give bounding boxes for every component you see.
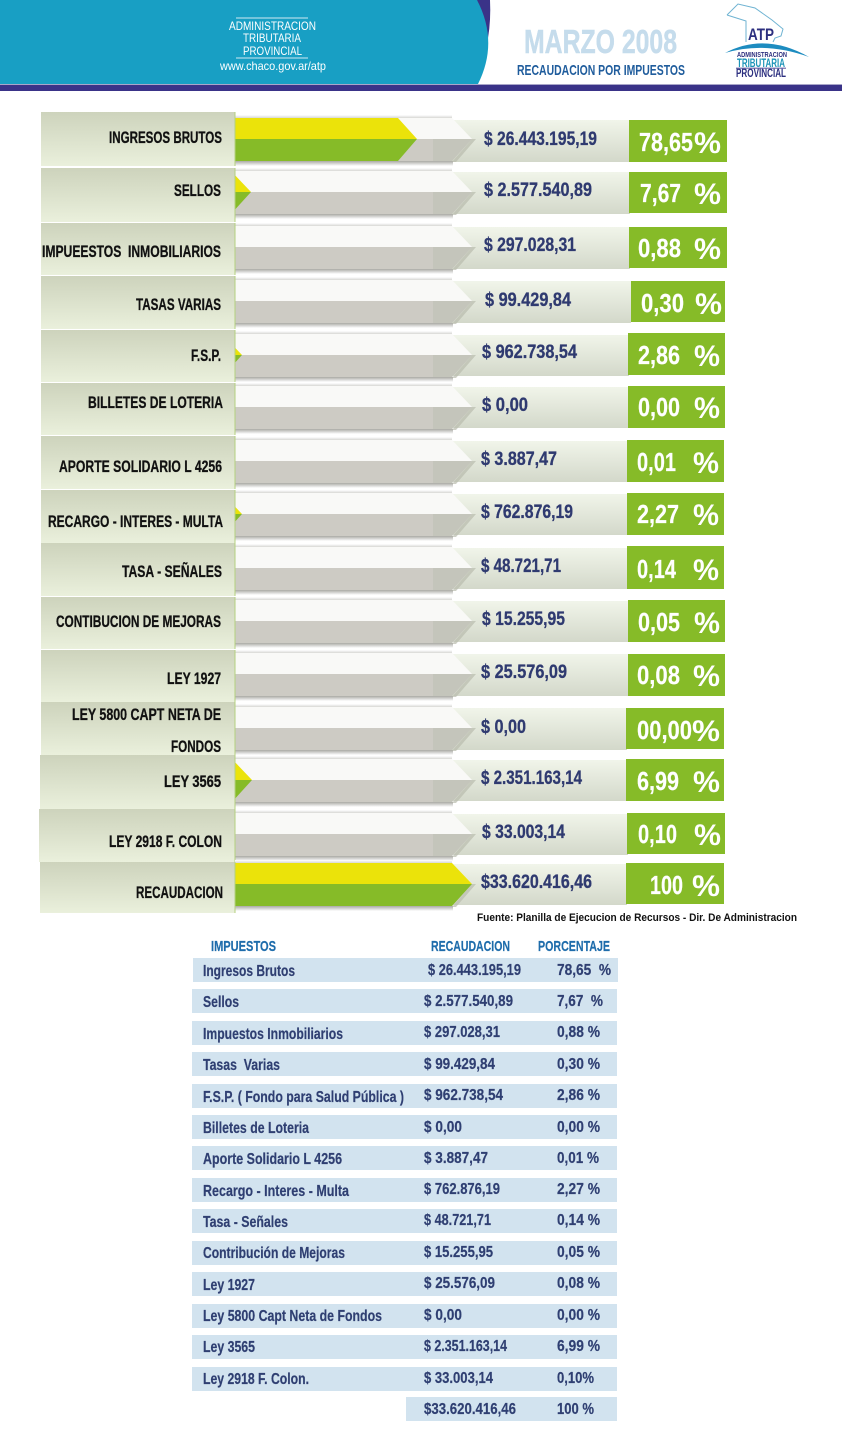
header agency name <box>219 18 326 73</box>
row: Ley 2918: 0,10 <box>638 819 677 849</box>
row: F.S.P.: 2,86 <box>638 340 680 370</box>
table header <box>211 938 610 955</box>
row: Aporte Solidario: $ 3.887,47 <box>481 449 557 470</box>
row: Ley 2918: $ 33.003,14 <box>482 822 565 843</box>
table row: Billetes de Loteria: $ 0,00 <box>424 1119 462 1136</box>
row: Ley 5800: LEY 5800 CAPT NETA DE <box>72 705 221 724</box>
table row: Ley 1927: Ley 1927 <box>203 1277 255 1294</box>
row: Contribucion de Mejoras <box>41 597 725 649</box>
table row: Ley 3565: Ley 3565 <box>203 1339 255 1356</box>
table row: Sellos: Sellos <box>203 994 239 1011</box>
row: Ley 2918: LEY 2918 F. COLON <box>109 832 222 851</box>
table row: Aporte Solidario <box>192 1146 617 1170</box>
logo: ATP: ADMINISTRACION <box>737 52 787 59</box>
table header: RECAUDACION <box>431 938 510 955</box>
table row: Ley 3565: 6,99 % <box>557 1338 600 1355</box>
table row: Tasa Senales: Tasa - Señales <box>203 1214 288 1231</box>
row: Recargo Interes Multa <box>41 490 724 543</box>
table row: Tasa Senales <box>192 1209 617 1233</box>
table row: Recargo Interes Multa: 2,27 % <box>557 1181 600 1198</box>
row: Contribucion de Mejoras: CONTIBUCION DE MEJORAS <box>56 612 221 631</box>
row: Tasas Varias: % <box>695 288 722 321</box>
row: Sellos: SELLOS <box>174 181 221 200</box>
row: Ley 1927 <box>41 650 725 702</box>
row: Billetes de Loteria <box>41 383 725 435</box>
table row: Impuestos Inmobiliarios: 0,88 % <box>557 1024 600 1041</box>
row: Ley 5800: FONDOS <box>171 737 221 756</box>
row: Ingresos Brutos: $ 26.443.195,19 <box>484 129 597 150</box>
table row: Impuestos Inmobiliarios: Impuestos Inmobiliarios <box>203 1026 343 1043</box>
table row: F.S.P.: 2,86 % <box>557 1087 600 1104</box>
row: Ingresos Brutos: % <box>694 127 721 160</box>
table row: Ley 2918 <box>192 1367 617 1391</box>
row: Recargo Interes Multa: RECARGO - INTERES - MULTA <box>48 512 223 531</box>
row: Tasas Varias: 0,30 <box>641 288 684 318</box>
table row: F.S.P.: $ 962.738,54 <box>424 1087 503 1104</box>
row: Recaudacion total: $33.620.416,46 <box>481 872 592 893</box>
row: Ley 2918 <box>39 809 725 862</box>
table row: Ley 3565 <box>192 1335 617 1359</box>
table row: Sellos <box>192 989 617 1013</box>
table row: Recargo Interes Multa: $ 762.876,19 <box>424 1181 500 1198</box>
row: F.S.P.: F.S.P. <box>191 346 221 365</box>
table row: Contribucion de Mejoras: 0,05 % <box>557 1244 600 1261</box>
row: Tasas Varias: $ 99.429,84 <box>485 290 571 311</box>
row: Aporte Solidario: 0,01 <box>637 447 676 477</box>
header agency name: TRIBUTARIA <box>243 31 301 45</box>
table row: Billetes de Loteria <box>192 1115 617 1139</box>
row: Sellos: $ 2.577.540,89 <box>484 180 592 201</box>
logo: ATP <box>725 4 809 80</box>
row: Tasa Senales: $ 48.721,71 <box>481 556 561 577</box>
row: Recaudacion total: 100 <box>650 870 683 900</box>
row: Recaudacion total <box>40 860 724 913</box>
table row: Tasas Varias: Tasas Varias <box>203 1057 280 1074</box>
row: Ley 3565: LEY 3565 <box>164 772 221 791</box>
table row: Ingresos Brutos: $ 26.443.195,19 <box>428 962 521 979</box>
table row: Ley 3565: $ 2.351.163,14 <box>424 1338 507 1355</box>
row: Ingresos Brutos: INGRESOS BRUTOS <box>109 128 222 147</box>
table row: Tasas Varias <box>192 1052 617 1076</box>
row: Tasa Senales: % <box>693 554 719 587</box>
row: Ley 3565 <box>40 755 724 809</box>
row: Ley 5800 <box>41 702 724 756</box>
row: Recargo Interes Multa: 2,27 <box>637 499 679 529</box>
row: Ley 5800: 00,00 <box>637 715 692 745</box>
row: Ley 1927: $ 25.576,09 <box>481 662 567 683</box>
row: Sellos: 7,67 <box>640 178 681 208</box>
table header: PORCENTAJE <box>538 938 610 955</box>
table row: Ley 1927: $ 25.576,09 <box>424 1275 495 1292</box>
row: Billetes de Loteria: BILLETES DE LOTERIA <box>88 393 223 412</box>
table row: total <box>406 1397 617 1421</box>
row: Ley 1927: LEY 1927 <box>167 669 221 688</box>
table row: Contribucion de Mejoras: $ 15.255,95 <box>424 1244 493 1261</box>
table row: total: 100 % <box>557 1401 594 1418</box>
row: Sellos <box>41 168 727 222</box>
row: Billetes de Loteria: 0,00 <box>638 392 680 422</box>
row: Aporte Solidario <box>41 436 724 489</box>
table row: F.S.P. <box>192 1084 617 1108</box>
row: Contribucion de Mejoras: 0,05 <box>638 607 680 637</box>
table row: Aporte Solidario: $ 3.887,47 <box>424 1150 488 1167</box>
table row: Tasas Varias: 0,30 % <box>557 1056 600 1073</box>
table row: Ley 5800: $ 0,00 <box>424 1307 462 1324</box>
table header: IMPUESTOS <box>211 938 276 955</box>
logo: ATP: ATP <box>748 25 774 44</box>
row: Ley 3565: 6,99 <box>637 766 679 796</box>
table row: Ley 5800: Ley 5800 Capt Neta de Fondos <box>203 1308 382 1325</box>
row: Tasa Senales <box>41 543 724 596</box>
row: F.S.P. <box>41 330 725 382</box>
header agency name: www.chaco.gov.ar/atp <box>219 59 326 73</box>
row: Ley 5800: $ 0,00 <box>481 717 526 738</box>
row: Ley 3565: $ 2.351.163,14 <box>481 768 582 789</box>
row: Ley 1927: % <box>693 660 720 693</box>
row: Contribucion de Mejoras: $ 15.255,95 <box>482 609 565 630</box>
row: Ley 1927: 0,08 <box>637 660 680 690</box>
table row: Sellos: $ 2.577.540,89 <box>424 993 513 1010</box>
logo: ATP: TRIBUTARIA <box>737 56 785 70</box>
source note: Fuente: Planilla de Ejecucion de Recursos - Dir. De Administracion <box>477 912 797 924</box>
table row: F.S.P.: F.S.P. ( Fondo para Salud Pública ) <box>203 1089 404 1106</box>
row: Ley 5800: % <box>692 715 720 748</box>
table row: Tasas Varias: $ 99.429,84 <box>424 1056 495 1073</box>
header banner <box>0 0 842 91</box>
table row: Ley 2918: 0,10% <box>557 1370 594 1387</box>
table row: Ingresos Brutos: 78,65 % <box>557 962 611 979</box>
table row: Ingresos Brutos <box>193 958 618 982</box>
table row: Contribucion de Mejoras: Contribución de Mejoras <box>203 1245 345 1262</box>
row: Ingresos Brutos <box>41 112 727 166</box>
row: Impuestos Inmobiliarios: % <box>694 233 721 266</box>
row: Tasa Senales: 0,14 <box>637 554 676 584</box>
row: Aporte Solidario: APORTE SOLIDARIO L 4256 <box>59 457 222 476</box>
table row: Ley 5800: 0,00 % <box>557 1307 600 1324</box>
row: Aporte Solidario: % <box>693 447 719 480</box>
row: Tasas Varias <box>41 276 725 329</box>
table row: Tasa Senales: $ 48.721,71 <box>424 1212 491 1229</box>
header agency name: PROVINCIAL <box>243 44 302 58</box>
table row: Ley 1927: 0,08 % <box>557 1275 600 1292</box>
table row: Billetes de Loteria: 0,00 % <box>557 1119 600 1136</box>
row: Impuestos Inmobiliarios: $ 297.028,31 <box>484 235 576 256</box>
table row: Ley 2918: $ 33.003,14 <box>424 1370 493 1387</box>
table row: Ley 2918: Ley 2918 F. Colon. <box>203 1371 309 1388</box>
row: Recaudacion total: RECAUDACION <box>136 883 223 902</box>
table row: Contribucion de Mejoras <box>192 1241 617 1265</box>
row: Tasas Varias: TASAS VARIAS <box>136 295 221 314</box>
row: Impuestos Inmobiliarios <box>41 223 727 275</box>
row: Recargo Interes Multa: $ 762.876,19 <box>481 502 573 523</box>
row: Ley 3565: % <box>693 766 720 799</box>
table row: Ley 1927 <box>192 1272 617 1296</box>
logo: ATP: PROVINCIAL <box>736 68 786 80</box>
table row: total: $33.620.416,46 <box>424 1401 516 1418</box>
row: F.S.P.: % <box>694 340 720 373</box>
row: Impuestos Inmobiliarios: 0,88 <box>638 233 681 263</box>
table row: Impuestos Inmobiliarios: $ 297.028,31 <box>424 1024 500 1041</box>
table row: Aporte Solidario: 0,01 % <box>557 1150 599 1167</box>
row: Tasa Senales: TASA - SEÑALES <box>122 561 222 581</box>
row: Sellos: % <box>694 178 721 211</box>
row: Ingresos Brutos: 78,65 <box>639 127 693 157</box>
row: Impuestos Inmobiliarios: IMPUEESTOS INMOBILIARIOS <box>42 242 221 261</box>
header agency name: ADMINISTRACION <box>229 19 316 33</box>
table row: Ley 5800 <box>192 1304 617 1328</box>
row: F.S.P.: $ 962.738,54 <box>482 342 577 363</box>
row: Billetes de Loteria: $ 0,00 <box>482 395 528 416</box>
row: Recargo Interes Multa: % <box>693 499 719 532</box>
table row: Sellos: 7,67 % <box>557 993 603 1010</box>
table row: Billetes de Loteria: Billetes de Loteria <box>203 1120 309 1137</box>
row: Contribucion de Mejoras: % <box>694 607 720 640</box>
subtitle: RECAUDACION POR IMPUESTOS <box>517 62 685 79</box>
table row: Ingresos Brutos: Ingresos Brutos <box>203 963 295 980</box>
title: month: MARZO 2008 <box>524 23 677 60</box>
table row: Impuestos Inmobiliarios <box>192 1021 617 1045</box>
table row: Recargo Interes Multa <box>192 1178 617 1202</box>
table row: Tasa Senales: 0,14 % <box>557 1212 600 1229</box>
table row: Aporte Solidario: Aporte Solidario L 4256 <box>203 1151 342 1168</box>
row: Recaudacion total: % <box>692 870 720 903</box>
table row: Recargo Interes Multa: Recargo - Interes - Multa <box>203 1183 349 1200</box>
row: Ley 2918: % <box>694 819 721 852</box>
row: Billetes de Loteria: % <box>694 392 720 425</box>
